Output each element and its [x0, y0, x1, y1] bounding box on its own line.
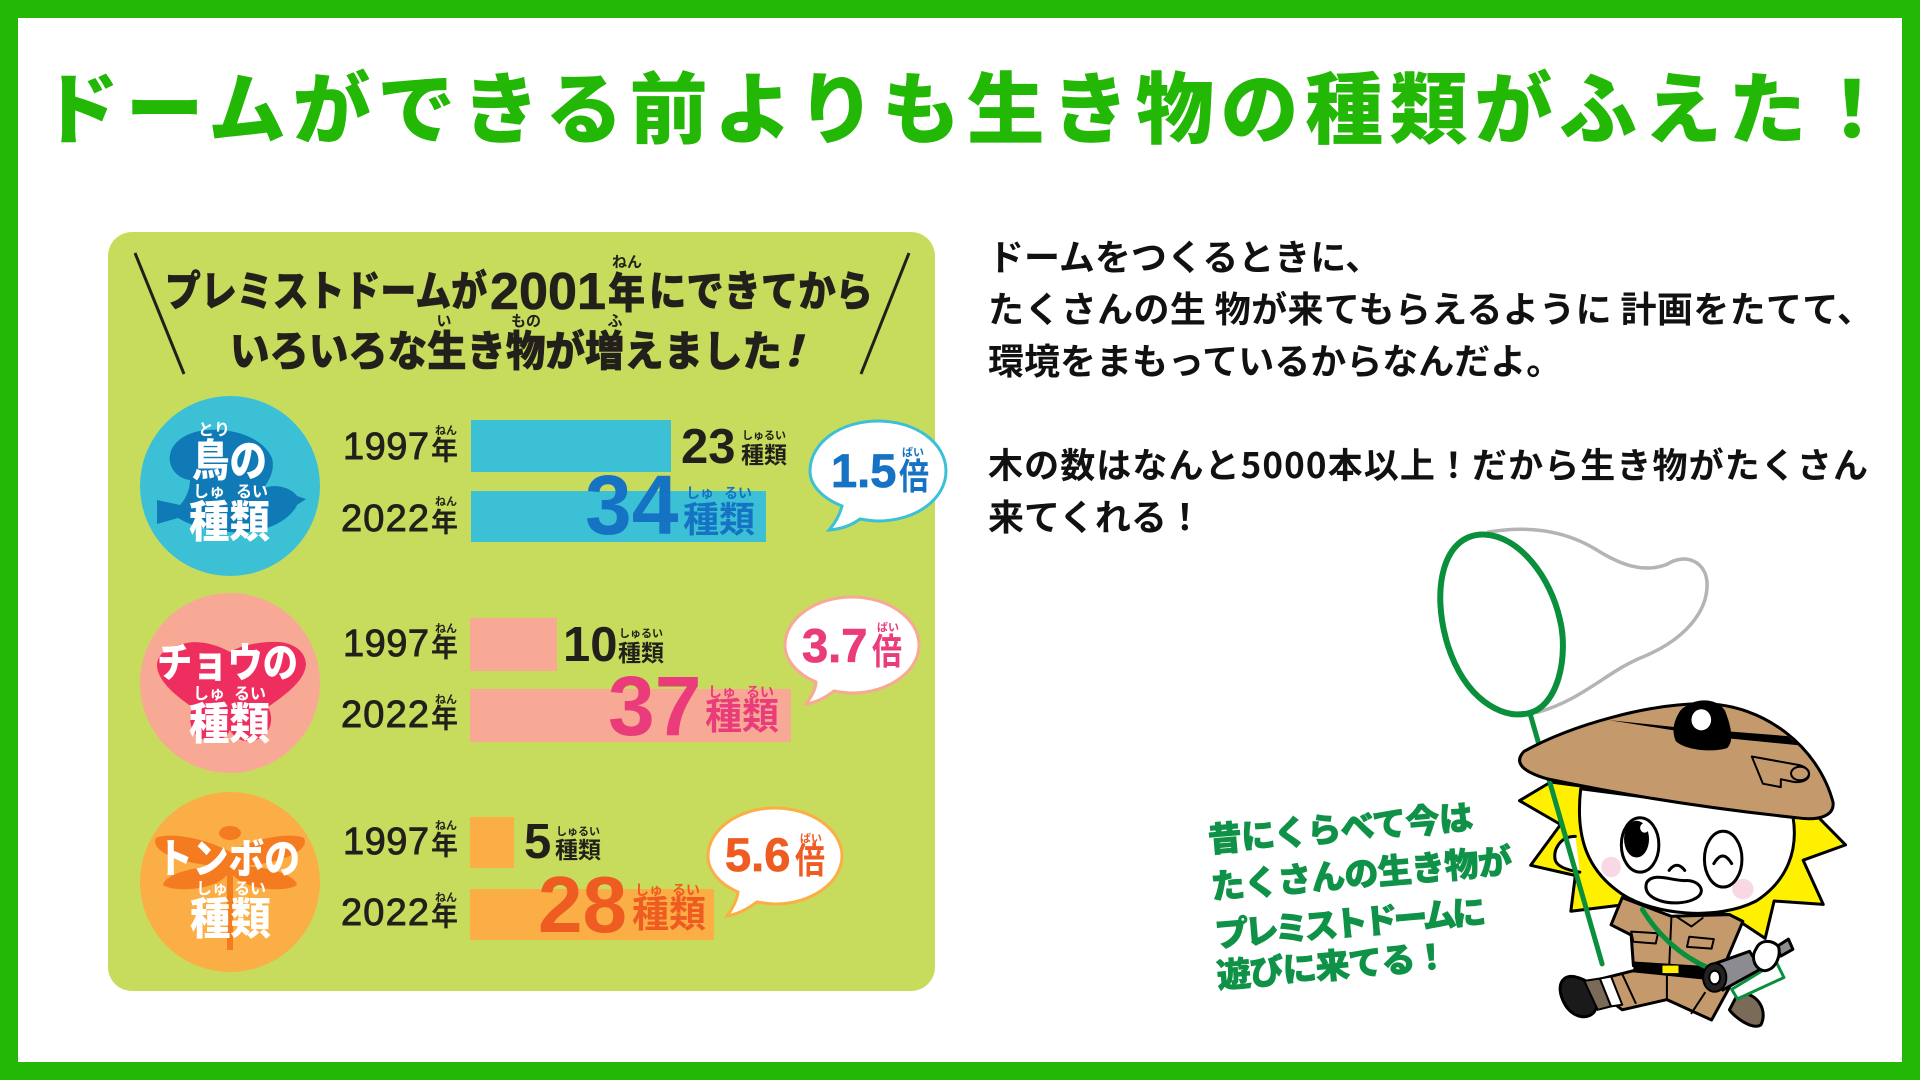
callout: 3.7x: 3.7 — [802, 619, 867, 672]
callout: 1.5x: 1.5 — [831, 444, 896, 497]
panel heading: プレミストドームが — [165, 258, 487, 319]
callout: 3.7x: 倍 — [872, 623, 902, 675]
icon: dragonfly badge: トンボの — [157, 825, 300, 885]
icon: dragonfly badge: るい — [234, 875, 266, 899]
cheeks — [1601, 857, 1621, 877]
bar: butterflies 1997: しゅるい — [619, 625, 663, 641]
callout: 1.5x: 倍 — [899, 448, 929, 500]
bar: dragonflies 1997: 1997 — [343, 821, 429, 863]
text block: explanation: 木の数はなんと5000本以上！だから生き物がたくさん — [988, 438, 1868, 489]
icon: butterfly badge: しゅ — [193, 680, 225, 704]
bar: butterflies 2022: ねん — [435, 691, 457, 707]
bar: butterflies 1997: 10 — [563, 618, 618, 672]
hand — [1555, 836, 1580, 872]
icon: bird badge: るい — [236, 478, 268, 502]
bar: birds 2022: しゅ — [686, 483, 714, 503]
bar: birds 1997: 種類 — [741, 436, 787, 470]
bar: dragonflies 2022 — [341, 860, 714, 949]
icon: butterfly badge — [140, 593, 320, 773]
bar: birds 2022: 34 — [585, 458, 679, 552]
callout: green message: たくさんの生き物が — [1209, 834, 1514, 909]
panel heading: ねん — [612, 251, 642, 272]
icon: butterfly badge: るい — [234, 680, 266, 704]
icon: dragonfly badge: しゅ — [196, 875, 228, 899]
title: ドームができる前よりも生き物の種類がふえた！ — [41, 48, 1891, 160]
bar: butterflies 1997: 年 — [431, 626, 458, 665]
net handle — [1531, 716, 1602, 964]
panel heading: い — [436, 310, 452, 331]
callout: 5.6x — [708, 808, 842, 916]
nose and mouth — [1669, 865, 1685, 870]
bar: butterflies 1997 — [343, 618, 664, 672]
hair — [1519, 782, 1846, 938]
bar: dragonflies 1997: しゅるい — [556, 823, 600, 839]
bar: butterflies 2022: 2022 — [341, 694, 429, 736]
panel heading — [135, 251, 909, 379]
strap — [1642, 910, 1707, 967]
icon: bird badge: とり — [198, 416, 230, 440]
callout: green message — [1206, 790, 1514, 998]
bar: dragonflies 2022: しゅ — [635, 880, 663, 900]
bar: dragonflies 2022: 年 — [431, 895, 458, 934]
callout: green message: 遊びに来てる！ — [1215, 929, 1450, 998]
text block: explanation: ドームをつくるときに、 — [988, 229, 1381, 281]
bar: butterflies 2022: 種類 — [705, 686, 779, 740]
belt — [1633, 962, 1709, 980]
bar: dragonflies 2022: るい — [672, 880, 700, 900]
bar: butterflies 2022: 年 — [431, 697, 458, 736]
face — [1579, 789, 1794, 913]
callout: green message: 昔にくらべて今は — [1206, 790, 1475, 862]
bar: birds 2022: ねん — [435, 493, 457, 509]
row: butterflies — [140, 593, 919, 773]
icon: bird badge: 鳥の — [192, 425, 267, 489]
bar: birds 2022 — [341, 458, 766, 552]
icon: butterfly badge: 種類 — [189, 688, 270, 752]
panel heading: もの — [511, 310, 541, 331]
icon: mascot with insect net — [1440, 529, 1846, 1026]
icon: dragonfly badge — [140, 792, 320, 972]
bar: dragonflies 1997: ねん — [435, 817, 457, 833]
bar: butterflies 2022: るい — [746, 682, 774, 702]
bar: butterflies 2022 — [341, 659, 791, 753]
hat badge — [1752, 756, 1809, 787]
panel heading: ふ — [607, 310, 623, 331]
panel heading: 2001 — [490, 263, 606, 321]
bar: dragonflies 1997: 5 — [524, 815, 551, 869]
eyes — [1621, 818, 1659, 872]
hat — [1520, 704, 1833, 819]
bar: dragonflies 2022: 種類 — [632, 884, 706, 938]
bar: dragonflies 2022: 28 — [538, 860, 627, 949]
callout: green message: プレミストドームに — [1213, 884, 1488, 957]
bar: birds 1997: 年 — [431, 429, 458, 468]
bar: butterflies 2022: しゅ — [708, 682, 736, 702]
net bag — [1488, 529, 1707, 712]
callout: 1.5x — [810, 421, 946, 530]
icon: bird badge: しゅ — [193, 478, 225, 502]
bar: birds 1997: 1997 — [343, 426, 429, 468]
binoculars — [1709, 951, 1761, 990]
callout: 5.6x: 5.6 — [725, 828, 790, 881]
bar: dragonflies 2022: ねん — [435, 889, 457, 905]
panel: species graph — [108, 232, 946, 991]
shoes and legs — [1560, 971, 1763, 1026]
callout: 3.7x: ばい — [877, 619, 899, 635]
panel heading: にできてから — [649, 258, 873, 319]
panel heading: いろいろな生き物が増えました — [230, 318, 782, 379]
bar: birds 1997 — [343, 420, 787, 474]
text block: explanation — [988, 229, 1873, 541]
shirt — [1611, 898, 1743, 969]
text block: explanation: 環境をまもっているからなんだよ。 — [988, 333, 1562, 385]
bar: birds 2022: 2022 — [341, 498, 429, 540]
bar: dragonflies 1997: 年 — [431, 824, 458, 863]
icon: bird badge — [140, 396, 320, 576]
panel heading: 年 — [608, 260, 645, 321]
callout: 3.7x — [785, 597, 919, 704]
text block: explanation: たくさんの生 物が来てもらえるように 計画をたてて、 — [988, 281, 1873, 333]
bar: butterflies 2022: 37 — [608, 659, 701, 753]
bar: birds 1997: ねん — [435, 422, 457, 438]
bar: birds 2022: 種類 — [683, 491, 755, 543]
bar: butterflies 1997: 種類 — [618, 634, 664, 668]
bar: butterflies 1997: ねん — [435, 620, 457, 636]
callout: 1.5x: ばい — [902, 444, 924, 460]
bar: birds 1997: 23 — [681, 420, 736, 474]
bar: birds 2022: 年 — [431, 501, 458, 540]
card — [1732, 962, 1784, 999]
net ring — [1440, 534, 1563, 714]
bar: birds 1997: しゅるい — [742, 427, 786, 443]
callout: 5.6x: ばい — [800, 830, 822, 846]
panel heading: ！ — [769, 319, 826, 379]
bar: dragonflies 1997 — [343, 815, 601, 869]
bar: birds 2022: るい — [724, 483, 752, 503]
callout: 5.6x: 倍 — [795, 832, 825, 884]
bar: butterflies 1997: 1997 — [343, 623, 429, 665]
row: dragonflies — [140, 792, 842, 972]
icon: butterfly badge: チョウの — [157, 629, 298, 689]
row: birds — [140, 396, 946, 576]
icon: bird badge: 種類 — [189, 486, 270, 550]
icon: dragonfly badge: 種類 — [190, 883, 271, 947]
bar: dragonflies 2022: 2022 — [341, 892, 429, 934]
bar: dragonflies 1997: 種類 — [555, 831, 601, 865]
gloved hand — [1754, 941, 1779, 971]
text block: explanation: 来てくれる！ — [988, 489, 1203, 541]
